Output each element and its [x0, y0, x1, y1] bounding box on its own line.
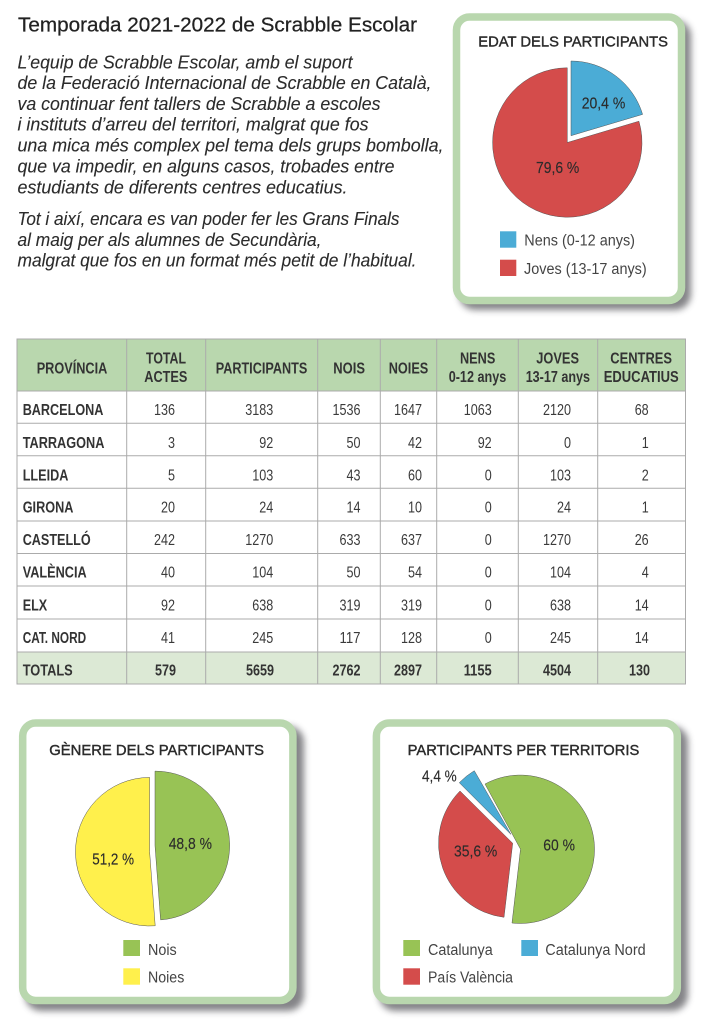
row: Totals: 2762 [332, 663, 360, 680]
totals row background [17, 652, 686, 684]
row: Castelló: CASTELLÓ [23, 531, 91, 549]
row: Cat. Nord: 245 [550, 630, 571, 647]
intro paragraph 1: de la Federació Internacional de Scrabble en Català, [18, 73, 432, 93]
row: Lleida: 0 [485, 468, 492, 484]
intro paragraph 2: malgrat que fos en un format més petit de l’habitual. [18, 251, 416, 271]
row: Girona: 24 [557, 500, 571, 517]
row: Castelló: 242 [154, 532, 175, 549]
row: Barcelona: 1063 [464, 402, 492, 419]
row: Cat. Nord: 117 [340, 630, 360, 647]
row: Elx [23, 598, 649, 615]
pie chart: edat [493, 61, 643, 217]
legend: territoris: Catalunya Nord [545, 942, 646, 959]
title: Temporada 2021-2022 de Scrabble Escolar [18, 15, 417, 37]
legend: edat: Nens (0-12 anys) [524, 233, 635, 250]
row: Barcelona: 1536 [332, 402, 360, 419]
intro paragraph 1: va continuar fent tallers de Scrabble a escoles [18, 94, 380, 114]
row: Elx: 319 [340, 598, 360, 615]
row: Girona: 10 [408, 500, 422, 517]
intro paragraph 1: una mica més complex pel tema dels grups bombolla, [18, 136, 444, 156]
row: Castelló: 1270 [543, 532, 571, 549]
table header: TOTAL [146, 350, 186, 368]
row: Castelló: 1270 [245, 532, 274, 549]
table header: JOVES [536, 350, 579, 368]
row: Cat. Nord: 0 [485, 630, 492, 647]
row: Totals: 4504 [543, 663, 571, 680]
legend: territoris: País València [428, 970, 513, 987]
row: Barcelona: 136 [154, 402, 175, 419]
heading: EDAT DELS PARTICIPANTS [478, 35, 668, 51]
legend: gènere: Nois [148, 942, 177, 959]
row: Cat. Nord: 245 [252, 630, 273, 647]
row: Tarragona: 3 [168, 435, 175, 452]
row: València [23, 565, 649, 582]
row: Lleida: 5 [168, 468, 175, 484]
row: Totals: 2897 [394, 663, 422, 680]
row: Tarragona: 1 [642, 435, 649, 452]
pie chart: territoris [422, 769, 594, 923]
row: Lleida: 2 [642, 468, 649, 484]
row: Elx: 14 [635, 598, 649, 615]
heading: PARTICIPANTS PER TERRITORIS [408, 743, 639, 759]
pie chart: gènere [75, 771, 230, 926]
pie chart: edat: 20,4 % [582, 95, 625, 112]
row: Cat. Nord: 41 [161, 630, 175, 647]
legend: edat: Joves (13-17 anys) [524, 261, 647, 278]
panel: edat dels participants [456, 17, 691, 310]
row: Girona: 1 [642, 500, 649, 517]
row: Cat. Nord: 14 [635, 630, 649, 647]
row: Barcelona: 2120 [543, 402, 571, 419]
row: Elx: 638 [550, 598, 571, 615]
row: Cat. Nord: CAT. NORD [23, 630, 86, 647]
row: Barcelona: 1647 [394, 402, 422, 419]
intro paragraph 2: al maig per als alumnes de Secundària, [18, 230, 322, 250]
row: Barcelona: 3183 [245, 402, 273, 419]
row: Barcelona: 68 [635, 402, 649, 419]
row: València: 54 [408, 565, 422, 582]
intro paragraph 1: estudiants de diferents centres educatius. [18, 177, 348, 197]
table header: PROVÍNCIA [37, 360, 107, 377]
row: Lleida: 103 [550, 468, 571, 484]
pie chart: territoris: 60 % [543, 837, 575, 854]
row: Barcelona [23, 402, 649, 419]
row: Totals: TOTALS [23, 663, 73, 680]
row: Lleida: 103 [252, 468, 273, 484]
row: Elx: 92 [161, 598, 175, 615]
row: Tarragona: 92 [259, 435, 273, 452]
row: Tarragona: 50 [346, 435, 361, 452]
table header: CENTRES [610, 350, 672, 368]
row: Girona: 0 [485, 500, 492, 517]
row: Castelló: 633 [340, 532, 360, 549]
table: dades per província [17, 339, 686, 684]
row: València: 40 [161, 565, 175, 582]
row: Elx: 638 [252, 598, 273, 615]
row: Girona [23, 500, 649, 517]
pie chart: gènere: 48,8 % [169, 836, 212, 853]
row: Castelló: 26 [635, 532, 649, 549]
row: Castelló: 0 [485, 532, 492, 549]
row: Elx: 0 [485, 598, 492, 615]
row: Elx: ELX [23, 598, 48, 615]
intro paragraph 1 [18, 52, 444, 197]
row: València: 50 [346, 565, 361, 582]
legend: territoris [403, 940, 646, 987]
row: Totals: 1155 [464, 663, 492, 680]
table header: PARTICIPANTS [216, 360, 307, 377]
heading: GÈNERE DELS PARTICIPANTS [49, 742, 264, 759]
table header [17, 339, 686, 391]
table header: ACTES [144, 369, 187, 386]
table header: NOIES [389, 360, 428, 377]
row: Totals [23, 663, 650, 680]
row: Barcelona: BARCELONA [23, 402, 103, 419]
row: Elx: 319 [401, 598, 422, 615]
intro paragraph 1: i instituts d’arreu del territori, malgrat que fos [18, 115, 368, 135]
row: Tarragona: 42 [408, 435, 422, 452]
row: Girona: 20 [161, 500, 175, 517]
legend: gènere [123, 940, 185, 987]
row: Totals: 579 [155, 663, 176, 680]
table header: NENS [460, 350, 495, 368]
panel: gènere dels participants [23, 723, 304, 1011]
row: València: 104 [252, 565, 274, 582]
row: Totals: 5659 [246, 663, 274, 680]
row: Lleida [23, 468, 649, 484]
pie chart: gènere: 51,2 % [92, 851, 134, 868]
intro paragraph 2 [18, 209, 416, 271]
row: Tarragona: TARRAGONA [23, 435, 104, 452]
row: Cat. Nord: 128 [401, 630, 422, 647]
legend: edat [500, 231, 647, 278]
row: Cat. Nord [23, 630, 649, 647]
legend: territoris: Catalunya [428, 942, 493, 959]
table header: 0-12 anys [449, 369, 506, 386]
row: València: VALÈNCIA [23, 565, 87, 582]
row: Lleida: 43 [346, 468, 360, 484]
row: Lleida: 60 [408, 468, 422, 484]
row: Tarragona: 0 [564, 435, 571, 452]
intro paragraph 2: Tot i així, encara es van poder fer les Grans Finals [18, 209, 400, 229]
row: València: 104 [550, 565, 571, 582]
row: Castelló: 637 [401, 532, 422, 549]
row: València: 4 [642, 565, 649, 582]
pie chart: territoris: 4,4 % [422, 769, 457, 786]
pie chart: edat: 79,6 % [536, 160, 579, 177]
intro paragraph 1: que va impedir, en alguns casos, trobades entre [18, 156, 394, 176]
table header: NOIS [333, 360, 365, 377]
row: Girona: GIRONA [23, 500, 73, 517]
table header: 13-17 anys [526, 369, 590, 386]
row: València: 0 [485, 565, 492, 582]
row: Lleida: LLEIDA [23, 468, 68, 484]
row: Tarragona [23, 435, 649, 452]
row: Girona: 24 [259, 500, 274, 517]
panel: participants per territoris [376, 723, 688, 1011]
row: Totals: 130 [629, 663, 650, 680]
intro paragraph 1: L’equip de Scrabble Escolar, amb el suport [18, 52, 353, 72]
table header: EDUCATIUS [604, 369, 679, 386]
legend: gènere: Noies [148, 970, 185, 987]
row: Castelló [23, 531, 649, 549]
pie chart: territoris: 35,6 % [454, 844, 497, 861]
row: Girona: 14 [346, 500, 361, 517]
row: Tarragona: 92 [478, 435, 492, 452]
